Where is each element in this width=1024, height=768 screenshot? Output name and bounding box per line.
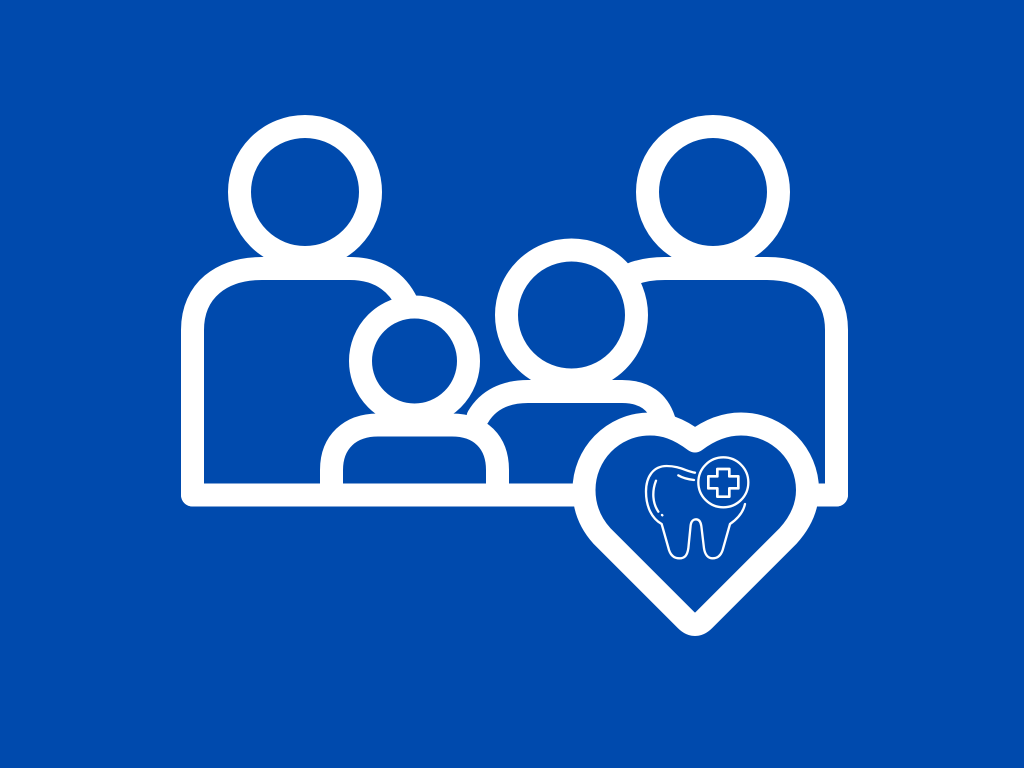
right adult: [632, 126, 836, 495]
older child: [478, 250, 664, 420]
tooth outline: [646, 466, 745, 558]
medical cross: [708, 469, 738, 497]
left adult: [192, 126, 407, 495]
younger child: [332, 307, 498, 495]
icon: family of four: [192, 126, 836, 495]
icon: tooth with medical cross: [646, 457, 748, 558]
table baseline: [192, 484, 836, 506]
tooth highlights: [653, 475, 694, 515]
medical circle: [698, 457, 748, 507]
icon: heart: [584, 424, 808, 624]
